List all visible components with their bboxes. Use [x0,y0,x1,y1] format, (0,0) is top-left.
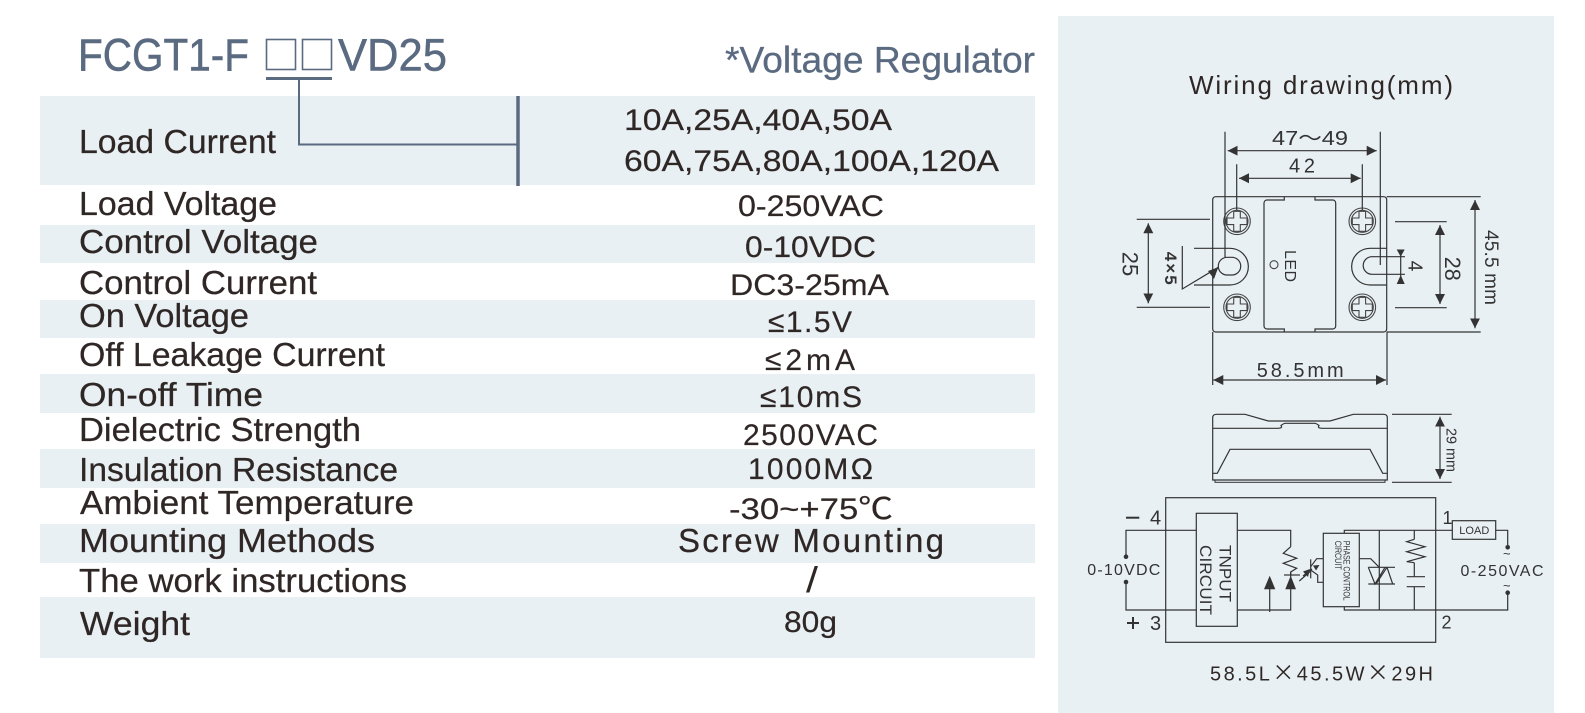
phase control circuit block [1323,533,1359,607]
LED label and indicator: LED [1281,250,1298,282]
dimension 45.5 mm: 45.5 mm [1480,230,1501,305]
output voltage label: ~ [1503,578,1511,593]
row: Control Voltage [40,223,1035,264]
row: Mounting Methods: Screw Mounting [678,522,944,559]
bracket connector from model code to load current [266,78,518,186]
row: The work instructions: The work instructions [79,562,407,599]
title: model number [78,30,447,80]
row: Mounting Methods: Mounting Methods [79,522,375,559]
right mounting slot [1352,248,1405,285]
panel: wiring drawing [1058,16,1554,713]
screw top right [1349,208,1376,235]
row: Control Current: Control Current [79,264,317,301]
overall dimensions note: 58.5L×45.5W×29H [1210,656,1433,688]
dimension 4 [1397,250,1425,284]
output terminal dots [1505,545,1510,595]
row: Dielectric Strength [79,411,878,452]
specification table [40,96,1035,658]
load box: LOAD [1459,525,1489,537]
row: On Voltage: ≤1.5V [768,306,852,339]
subtitle: voltage regulator: *Voltage Regulator [725,40,1035,80]
row: Load Voltage: Load Voltage [79,185,277,222]
row: Control Current [79,264,889,302]
side view body [1213,414,1387,480]
LED label and indicator [1270,250,1298,282]
row: Ambient Temperature: -30~+75℃ [729,493,893,526]
relay outline [1166,498,1436,642]
row: Load Current: 60A,75A,80A,100A,120A [624,145,999,178]
row: Mounting Methods [40,522,1035,563]
dimension 4x5 leader [1161,246,1218,289]
row: Off Leakage Current: ≤2mA [765,344,855,377]
row: Load Current: Load Current [79,123,276,160]
row: The work instructions: / [806,559,818,600]
row: Insulation Resistance: Insulation Resistance [79,451,398,488]
dimension 29 mm [1392,414,1460,482]
LED cover [1264,197,1336,332]
row: Weight: Weight [80,605,190,642]
row: The work instructions [79,559,818,600]
side view trapezoid [1213,449,1387,473]
output voltage label [1460,546,1544,593]
side view dimension drawing [1213,414,1460,482]
dimension 29 mm: 29 mm [1443,428,1460,472]
input circuit block: TNPUT [1215,545,1234,602]
screw bottom right [1349,294,1376,321]
row: Weight: 80g [784,606,837,639]
row: On-off Time: ≤10mS [760,381,862,414]
terminal labels: 2 [1442,612,1452,632]
resistor input [1283,547,1297,575]
input terminal dots [1124,554,1128,584]
row: Dielectric Strength: Dielectric Strength [79,411,361,448]
row: Off Leakage Current [79,336,855,377]
row: Control Current: DC3-25mA [730,269,889,302]
row: Load Current [40,96,1035,185]
dimension 58.5mm: 58.5mm [1257,360,1344,382]
row: Control Voltage: Control Voltage [79,223,318,260]
row: Load Voltage [79,185,884,223]
dimension 25: 25 [1117,252,1142,276]
terminal labels: 4 [1150,507,1161,529]
row: Insulation Resistance: 1000MΩ [748,453,873,486]
input voltage label: 0-10VDC [1087,562,1160,579]
screw top left [1224,208,1250,235]
phototransistor [1299,559,1323,582]
diodes [1264,575,1300,589]
row: On-off Time [40,374,1035,414]
dimension 47 to 49 [1225,128,1380,265]
phase control circuit block: PHASE CONTROL [1341,541,1351,601]
row: On-off Time: On-off Time [79,376,263,413]
input circuit block [1196,513,1237,626]
row: On Voltage: On Voltage [79,297,249,334]
snubber [1407,539,1425,587]
row: On Voltage [40,297,1035,339]
title: model number: FCGT1-F [78,30,249,80]
dimension 47 to 49: 47～49 [1272,128,1348,150]
terminal labels: 1 [1442,508,1453,528]
input wiring [1126,530,1291,612]
dimension 45.5 mm [1387,197,1501,332]
terminal labels [1126,507,1453,635]
circuit diagram [1087,498,1544,642]
left mounting slot [1194,248,1248,285]
load box [1452,521,1496,539]
title: model number: VD25 [338,30,447,80]
row: Control Voltage: 0-10VDC [745,231,876,264]
dimension 25 [1117,219,1210,307]
panel heading: Wiring drawing(mm) [1189,70,1453,100]
side view base plate [1215,480,1385,482]
row: Load Current: 10A,25A,40A,50A [624,104,892,137]
dimension 4x5 leader: 4×5 [1161,252,1180,285]
terminal labels: 3 [1150,613,1161,635]
row: Weight [40,597,1035,658]
screw bottom left [1224,294,1250,321]
row: Ambient Temperature [80,484,893,526]
output voltage label: 0-250VAC [1460,563,1544,580]
top view dimension drawing [1117,128,1501,385]
input circuit block: CIRCUIT [1196,545,1215,615]
row: Off Leakage Current: Off Leakage Current [79,336,385,373]
dimension 58.5mm [1213,332,1387,385]
phase control circuit block: CIRCUIT [1333,541,1343,570]
row: Load Voltage: 0-250VAC [738,190,884,223]
row: Insulation Resistance [40,449,1035,488]
side view lid [1213,423,1387,428]
device body outline [1213,197,1387,332]
dimension 28: 28 [1440,257,1465,281]
row: Dielectric Strength: 2500VAC [743,419,878,452]
output wiring [1344,530,1508,610]
triac [1359,559,1395,584]
dimension 42 [1237,156,1362,210]
dimension 42: 42 [1289,156,1315,178]
row: Ambient Temperature: Ambient Temperature [80,484,414,521]
dimension 4: 4 [1403,261,1425,271]
dimension 28 [1395,222,1465,308]
output voltage label: ~ [1503,546,1511,561]
